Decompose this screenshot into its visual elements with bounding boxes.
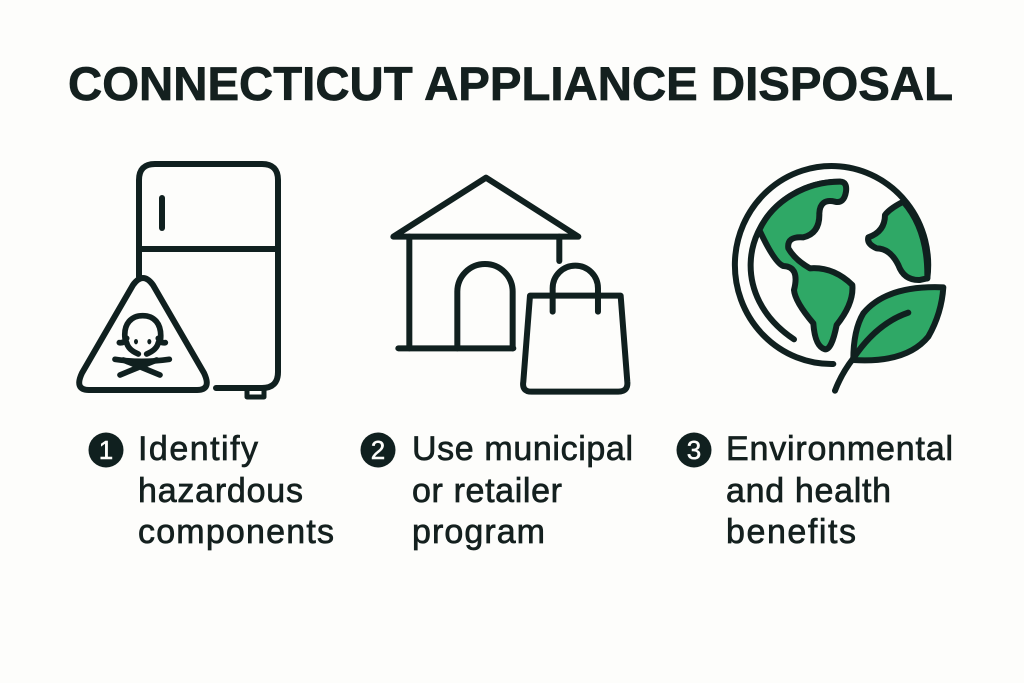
step 2 [360, 430, 633, 551]
step 1 label: hazardous [138, 472, 303, 510]
building floor line [398, 339, 513, 357]
refrigerator handle [159, 198, 165, 228]
step 3 label [726, 430, 953, 551]
refrigerator door divider [139, 246, 278, 252]
number badge 3: 3 [687, 435, 701, 465]
step 3 label: Environmental [726, 430, 953, 468]
shopping bag [523, 296, 627, 392]
icon: municipal building with shopping bag [393, 178, 627, 392]
continent: Americas [759, 182, 852, 349]
number badge 1: 1 [99, 435, 113, 465]
step 2 label [412, 430, 633, 551]
building wall [400, 237, 418, 348]
globe outer ring [735, 166, 928, 364]
refrigerator foot [247, 389, 264, 397]
step 2 label: or retailer [412, 472, 562, 510]
leaf stem and vein [835, 313, 908, 391]
arched door [457, 264, 513, 348]
downpipe [550, 237, 568, 261]
step 1 label [138, 430, 334, 551]
globe inner arc [751, 182, 840, 339]
step 3 [676, 430, 953, 551]
number badge 1 [88, 432, 124, 468]
icon: refrigerator with hazard triangle [79, 164, 278, 397]
step 3 label: and health [726, 472, 891, 510]
hazard triangle [79, 278, 207, 390]
icon: globe with leaf [735, 166, 943, 391]
building roof [393, 178, 578, 237]
bag handle [553, 266, 598, 312]
step 2 label: program [412, 513, 545, 551]
number badge 2: 2 [371, 435, 385, 465]
skull and crossbones [115, 316, 169, 375]
title: CONNECTICUT APPLIANCE DISPOSAL [68, 57, 953, 110]
step 3 label: benefits [726, 513, 856, 551]
step 1 label: components [138, 513, 334, 551]
number badge 3 [676, 432, 712, 468]
leaf [853, 287, 943, 360]
continent: Africa and Eurasia [868, 202, 927, 280]
step 2 label: Use municipal [412, 430, 633, 468]
step 1 label: Identify [138, 430, 258, 468]
refrigerator body [139, 164, 278, 388]
step 1 [88, 430, 334, 551]
number badge 2 [360, 432, 396, 468]
